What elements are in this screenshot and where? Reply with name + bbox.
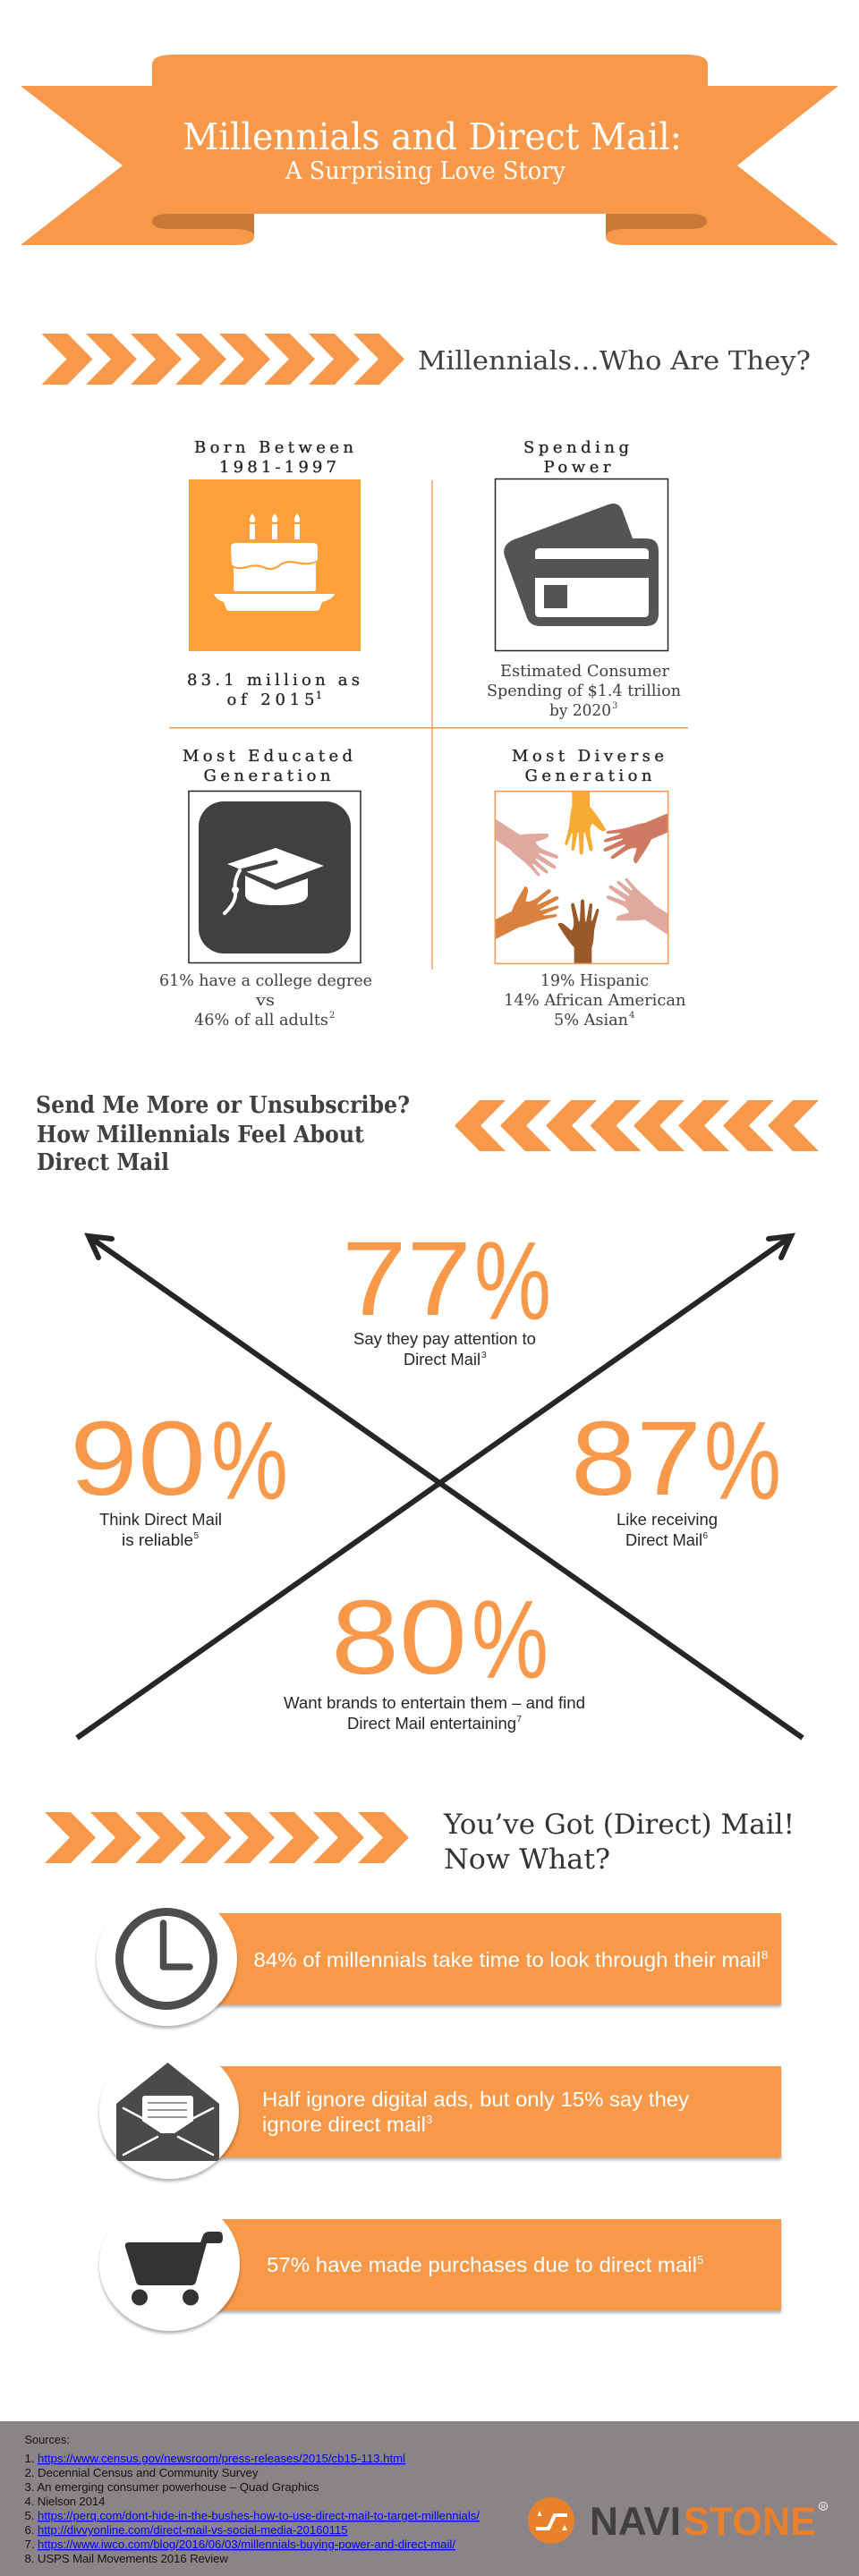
stat: 87%: % [704,1400,781,1523]
panel: born between [187,438,361,709]
stat: 83.1 million: 1 [316,690,322,701]
text: 84%: 8 [761,1948,768,1962]
stat: consumer spending: 3 [612,701,617,711]
hand: brown [557,899,600,963]
heading: who are they: Millennials…Who Are They? [418,345,811,376]
stat: 87%: 6 [703,1531,709,1541]
icon: open envelope [116,2063,219,2161]
sources list: https://www.census.gov/newsroom/press-releases/2015/cb15-113.html [38,2452,405,2465]
logo: navistone: STONE [684,2500,816,2544]
stat: demographics [504,971,686,1030]
heading: most educated: Most Educated [183,747,353,766]
logo: navistone: R [821,2504,826,2511]
hand: light pink lower [607,878,668,935]
sources list: 8. USPS Mail Movements 2016 Review [25,2552,228,2565]
stat: college degree: 2 [329,1011,335,1021]
stat: consumer spending [487,662,681,720]
heading: most diverse: Most Diverse [512,747,664,766]
stat: 77%: 3 [481,1351,487,1360]
stat: 77% [342,1220,551,1368]
footer panel [0,2421,859,2576]
text: half ignore: ignore direct mail [262,2113,426,2136]
heading: you've got direct mail: You’ve Got (Direct) Mail! [443,1809,795,1841]
stat: 77%: Direct Mail [404,1351,481,1368]
sources list: 4. Nielson 2014 [25,2495,106,2508]
icon: clock [120,1912,213,2005]
text: half ignore: 3 [426,2113,432,2126]
stat: college degree: 46% of all adults [194,1011,328,1030]
stat: demographics: 14% African American [504,991,686,1010]
heading: send me more or unsubscribe [36,1092,410,1176]
icon: graduation cap [189,791,361,962]
sources list: 7. [25,2538,35,2551]
stat: 90%: Think Direct Mail [99,1511,222,1529]
chevron arrow: section 1 [41,334,404,385]
heading: most diverse: Generation [524,767,652,785]
heading: you've got direct mail: Now What? [444,1843,610,1876]
stat: college degree [159,971,372,1030]
stat: 80%: Direct Mail entertaining [347,1715,516,1733]
heading: most educated [183,747,353,785]
stat: 90% [70,1400,288,1549]
sources list: 5. [25,2509,35,2522]
hand: yellow [565,792,607,855]
sources list: https://www.iwco.com/blog/2016/06/03/millennials-buying-power-and-direct-mail/ [38,2538,455,2551]
sources list: 3. An emerging consumer powerhouse – Quad Graphics [25,2480,319,2494]
heading: most educated: Generation [204,767,331,785]
arrow: up-left diagonal [89,1236,803,1738]
stat: 80%: 7 [517,1715,523,1724]
stat: 87%: Direct Mail [625,1531,702,1549]
sources list: 6. [25,2523,35,2537]
stat: college degree: vs [255,991,275,1010]
chevron arrow: section 3 [45,1812,409,1863]
sources list: Sources: [25,2433,70,2446]
stat: 87% [571,1400,781,1549]
hand: orange [496,886,559,939]
hand: light pink upper [496,819,558,877]
subtitle: A Surprising Love Story [285,157,566,185]
stat: 80%: % [472,1579,549,1702]
sources list: 2. Decennial Census and Community Survey [25,2466,259,2479]
title: Millennials and Direct Mail: [183,115,682,158]
stat: consumer spending: by 2020 [549,701,611,720]
text: 57%: 5 [697,2253,703,2267]
text: half ignore: Half ignore digital ads, but only 15% say they [262,2088,690,2111]
stat: 77%: Say they pay attention to [353,1330,536,1348]
sources list: https://perq.com/dont-hide-in-the-bushes-how-to-use-direct-mail-to-target-millennials/ [38,2509,480,2522]
heading: born between [194,438,353,477]
icon: shopping cart [125,2232,223,2306]
callout: made purchases [99,2197,781,2331]
banner: title ribbon [21,55,838,245]
stat: 80% [284,1579,585,1733]
heading: most diverse [512,747,664,785]
stat: 80%: 80 [331,1579,467,1697]
text: 57%: 57% have made purchases due to direct mail [267,2253,697,2276]
icon: credit card [496,479,668,651]
stat: demographics: 19% Hispanic [540,971,649,990]
stat: 87%: Like receiving [617,1511,718,1529]
grid: divider lines [169,480,688,970]
sources list [25,2433,480,2565]
icon: diverse hands [494,791,669,964]
hand: terracotta [603,813,668,864]
sources list: http://divvyonline.com/direct-mail-vs-social-media-20160115 [38,2523,347,2537]
stat: 90%: is reliable [122,1531,193,1549]
sources list: 1. [25,2452,35,2465]
panel: spending power [487,438,681,720]
panel: most educated [159,747,372,1030]
heading: born between: 1981-1997 [219,458,336,477]
stat: 77%: 77 [342,1220,472,1338]
stat: 90%: % [211,1400,288,1523]
heading: spending power: Power [544,458,611,477]
callout: look through mail [97,1892,781,2026]
stat: 87%: 87 [571,1400,702,1518]
stat: demographics: 4 [629,1011,634,1021]
icon: birthday cake [189,479,361,651]
stat: 90%: 90 [70,1400,206,1518]
heading: you've got direct mail [443,1809,795,1876]
callout: ignore digital ads [99,2045,781,2179]
heading: send me more or unsubscribe: Direct Mail [37,1149,169,1176]
stat: demographics: 5% Asian [554,1011,628,1030]
stat: consumer spending: Spending of $1.4 trillion [487,682,681,700]
stat: 83.1 million [187,671,360,709]
arrow: up-right diagonal [77,1236,791,1738]
stat: 83.1 million: of 2015 [227,691,315,709]
heading: spending power: Spending [523,438,629,457]
heading: born between: Born Between [194,438,353,457]
chevron arrow: section 2 [455,1100,819,1151]
logo: navistone: NAVI [590,2500,681,2544]
text: 84%: 84% of millennials take time to look through their mail [254,1948,761,1971]
stat: consumer spending: Estimated Consumer [500,662,669,681]
stat: 83.1 million: 83.1 million as [187,671,360,690]
stat: college degree: 61% have a college degree [159,971,372,990]
stat: 80%: Want brands to entertain them – and find [284,1694,585,1712]
heading: send me more or unsubscribe: Send Me More or Unsubscribe? [36,1092,410,1119]
heading: send me more or unsubscribe: How Millennials Feel About [37,1122,364,1148]
heading: spending power [523,438,629,477]
text: half ignore [262,2088,690,2136]
panel: most diverse [494,750,685,1025]
stat: 90%: 5 [193,1531,199,1541]
stat: 77%: % [474,1220,551,1343]
logo: navistone [528,2497,827,2544]
